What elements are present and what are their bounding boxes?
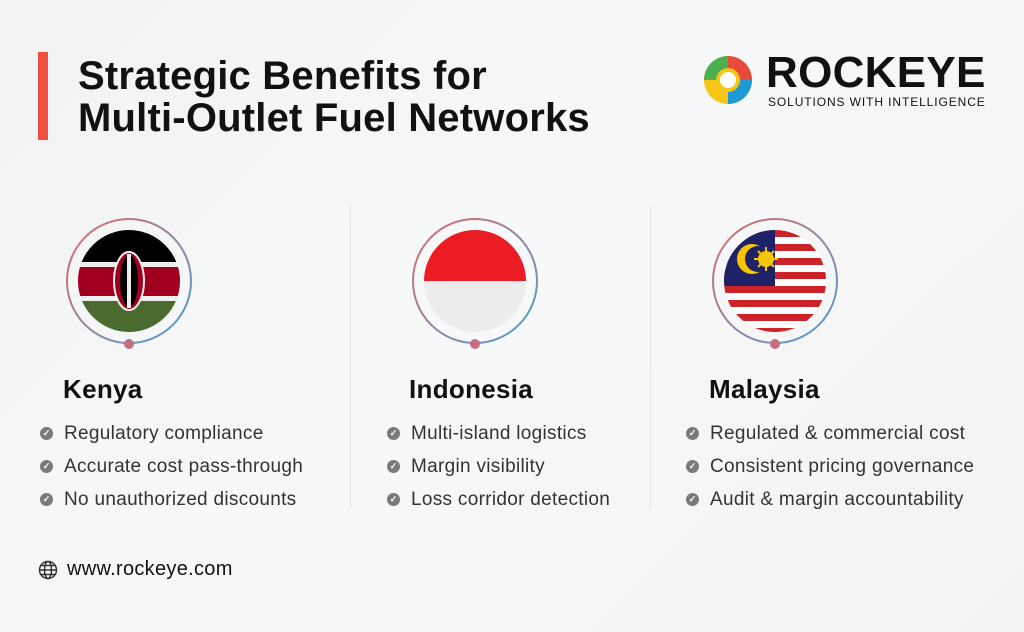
- panel: Malaysia: [686, 218, 974, 510]
- title accent bar: [38, 52, 48, 140]
- bullets: Indonesia: Multi-island logistics: [411, 423, 587, 444]
- icon: rockeye swirl: [704, 56, 752, 104]
- icon: Indonesia flag: [412, 218, 538, 349]
- panel: Indonesia: Indonesia: [409, 374, 533, 404]
- icon: Kenya flag: [66, 218, 192, 349]
- title: [78, 54, 590, 140]
- title: Multi-Outlet Fuel Networks: [78, 96, 590, 140]
- bullets: Indonesia: Loss corridor detection: [411, 489, 610, 510]
- bullets: Malaysia: [686, 423, 974, 510]
- bullets: Indonesia: [387, 423, 610, 510]
- icon: globe: [38, 560, 58, 580]
- bullets: Kenya: [40, 423, 303, 510]
- panel: Malaysia: Malaysia: [709, 374, 820, 404]
- title: Strategic Benefits for: [78, 54, 487, 98]
- panel: Kenya: [40, 218, 303, 510]
- panel: Indonesia: [387, 218, 610, 510]
- logo text: ROCKEYE: [766, 48, 986, 97]
- logo: [704, 48, 986, 109]
- bullets: Kenya: No unauthorized discounts: [64, 489, 296, 510]
- icon: Malaysia flag: [712, 218, 838, 349]
- footer: website: www.rockeye.com: [67, 558, 233, 580]
- panel: Kenya: Kenya: [63, 374, 143, 404]
- bullets: Kenya: Regulatory compliance: [64, 423, 264, 444]
- bullets: Kenya: Accurate cost pass-through: [64, 456, 303, 477]
- logo: SOLUTIONS WITH INTELLIGENCE: [768, 95, 986, 109]
- bullets: Indonesia: Margin visibility: [411, 456, 545, 477]
- bullets: Malaysia: Consistent pricing governance: [710, 456, 974, 477]
- bullets: Malaysia: Regulated & commercial cost: [710, 423, 965, 444]
- bullets: Malaysia: Audit & margin accountability: [710, 489, 964, 510]
